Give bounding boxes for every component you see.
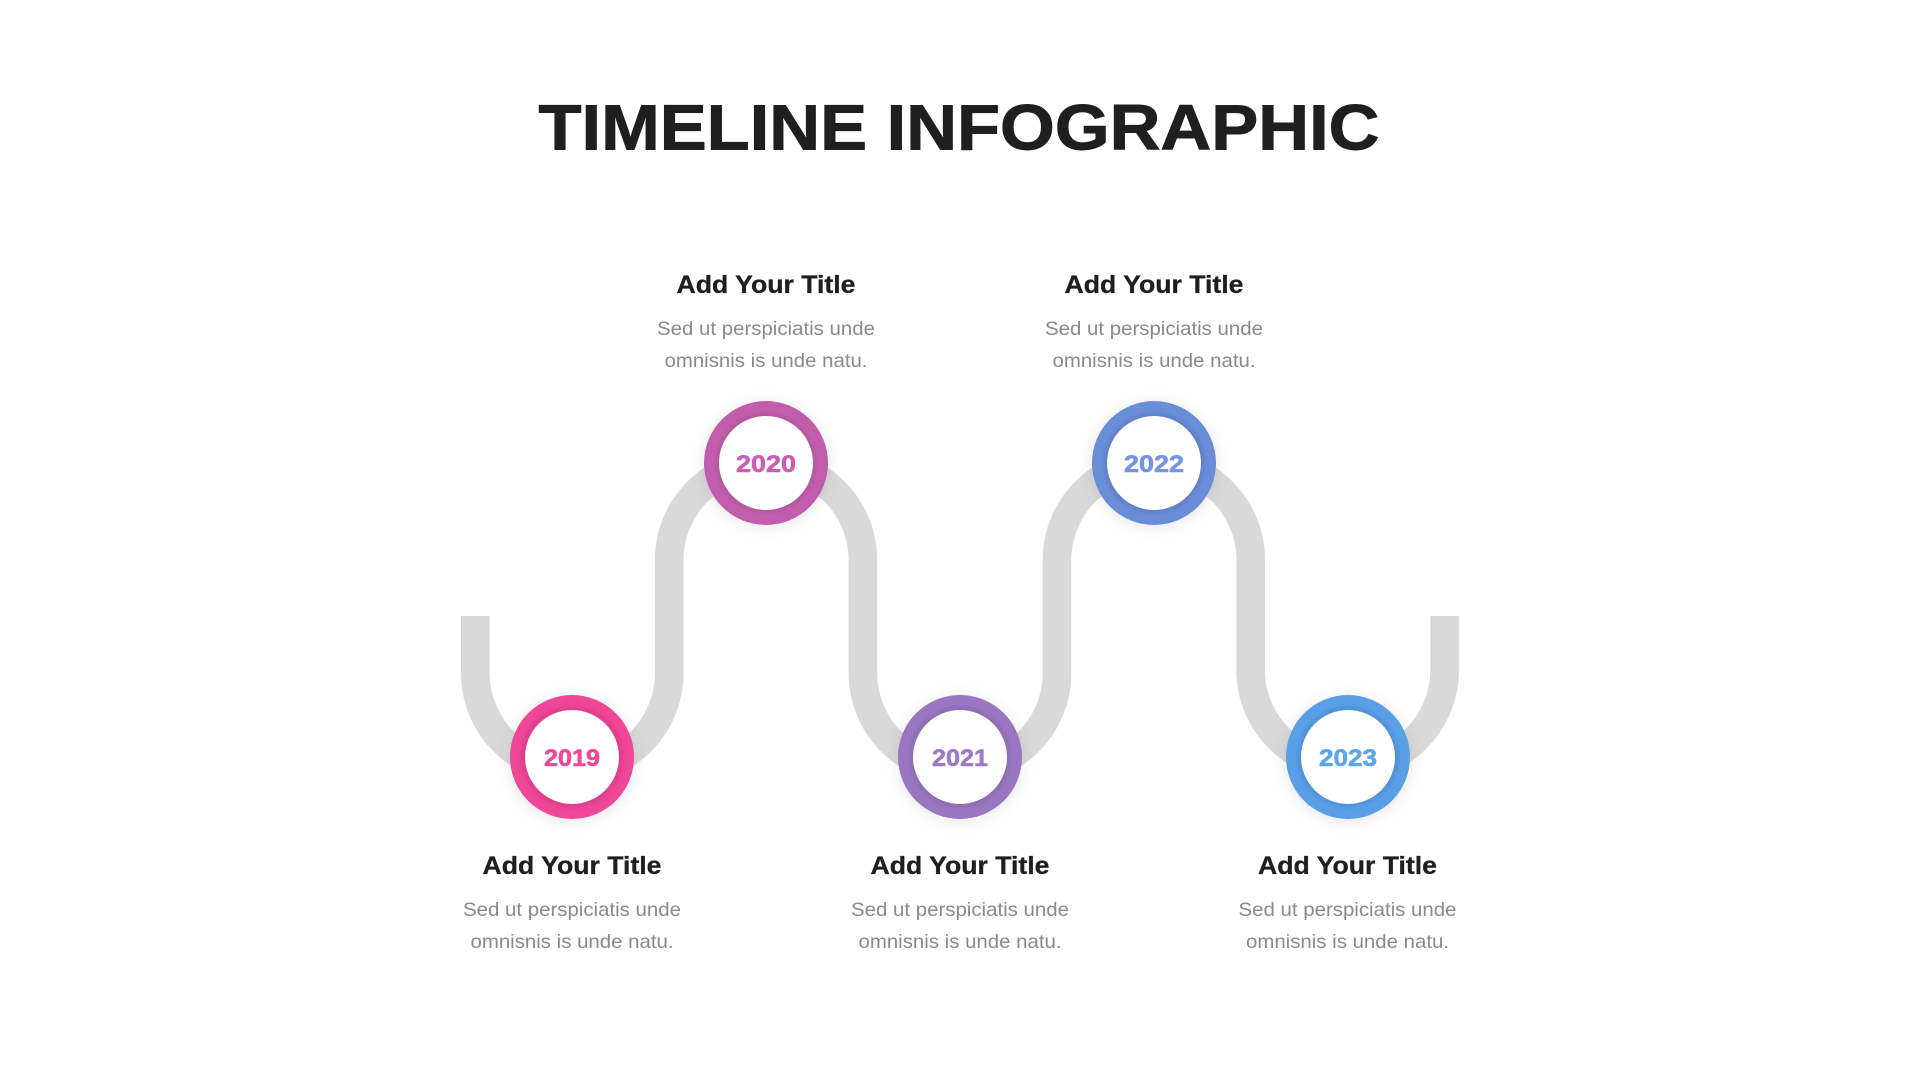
milestone 2019	[463, 695, 681, 953]
description 2022: Sed ut perspiciatis unde	[1045, 318, 1263, 340]
marker 2020: 2020	[736, 451, 796, 478]
milestone 2020	[657, 271, 875, 525]
heading 2020: Add Your Title	[676, 271, 856, 299]
milestone 2022	[1045, 271, 1263, 525]
description 2019	[463, 899, 681, 953]
marker 2023: 2023	[1319, 745, 1377, 772]
description 2023: Sed ut perspiciatis unde	[1238, 899, 1456, 921]
description 2021	[851, 899, 1069, 953]
description 2023: omnisnis is unde natu.	[1246, 931, 1449, 953]
heading 2019: Add Your Title	[482, 852, 662, 880]
description 2020: Sed ut perspiciatis unde	[657, 318, 875, 340]
description 2019: Sed ut perspiciatis unde	[463, 899, 681, 921]
milestone 2023	[1238, 695, 1456, 953]
marker 2023	[1286, 695, 1410, 819]
marker 2021	[898, 695, 1022, 819]
title: TIMELINE INFOGRAPHIC	[538, 92, 1380, 164]
heading 2021: Add Your Title	[870, 852, 1050, 880]
marker 2020	[704, 401, 828, 525]
description 2021: Sed ut perspiciatis unde	[851, 899, 1069, 921]
timeline track	[475, 463, 1445, 770]
description 2022	[1045, 318, 1263, 372]
heading 2023: Add Your Title	[1258, 852, 1437, 880]
marker 2022	[1092, 401, 1216, 525]
description 2019: omnisnis is unde natu.	[470, 931, 674, 953]
heading 2022: Add Your Title	[1064, 271, 1244, 299]
description 2022: omnisnis is unde natu.	[1052, 350, 1256, 372]
milestone 2021	[851, 695, 1069, 953]
description 2023	[1238, 899, 1456, 953]
marker 2019: 2019	[544, 745, 600, 772]
description 2021: omnisnis is unde natu.	[858, 931, 1062, 953]
marker 2022: 2022	[1124, 451, 1184, 478]
marker 2021: 2021	[932, 745, 988, 772]
marker 2019	[510, 695, 634, 819]
description 2020: omnisnis is unde natu.	[664, 350, 868, 372]
description 2020	[657, 318, 875, 372]
